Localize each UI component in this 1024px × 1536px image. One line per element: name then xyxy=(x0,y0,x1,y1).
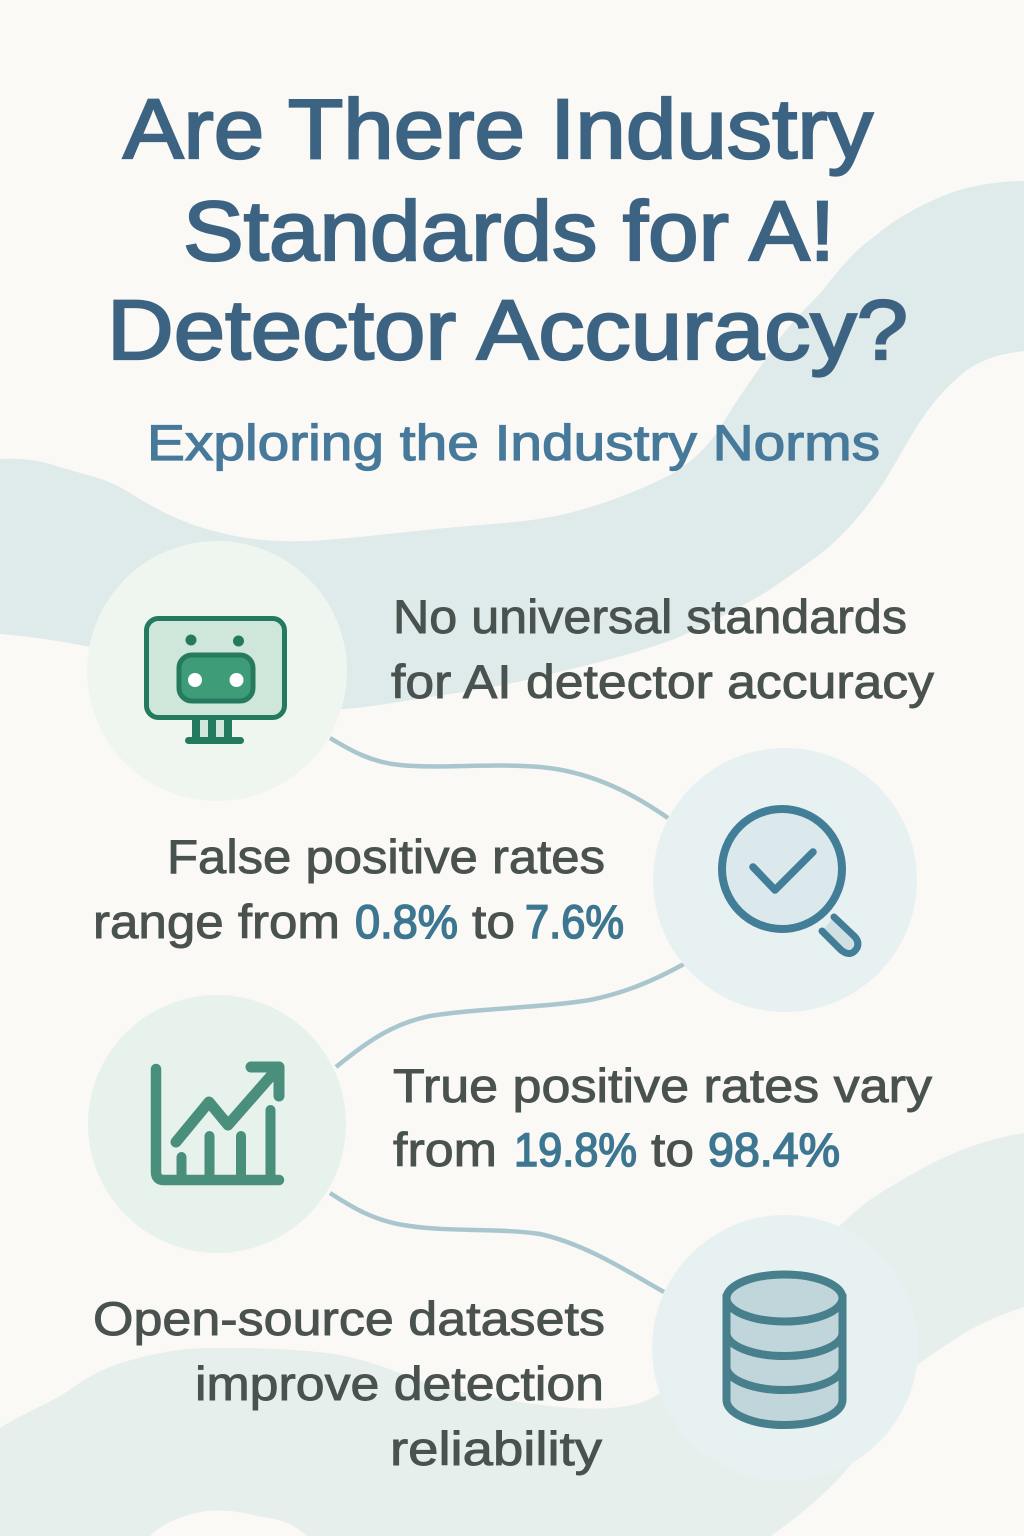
subtitle: Exploring the Industry Norms xyxy=(147,415,880,471)
text: false positive rates: 7.6% xyxy=(525,895,624,948)
text: no universal standards: No universal standards xyxy=(393,590,907,643)
text: false positive rates: range from xyxy=(93,895,340,948)
connector: monitor to magnifier xyxy=(330,738,668,818)
icon: database cylinder xyxy=(652,1215,918,1481)
panel: false positive rates xyxy=(93,748,917,1012)
text: true positive rates: True positive rates vary xyxy=(393,1059,933,1112)
text: open-source datasets: reliability xyxy=(390,1422,603,1475)
text: no universal standards xyxy=(391,590,935,708)
text: false positive rates xyxy=(93,830,624,948)
icon: robot monitor xyxy=(87,541,347,801)
text: true positive rates: 98.4% xyxy=(708,1123,840,1176)
panel: no universal standards xyxy=(87,541,935,801)
title: Detector Accuracy? xyxy=(107,283,908,377)
title: Standards for A! xyxy=(183,184,835,278)
title xyxy=(107,82,908,377)
text: false positive rates: to xyxy=(472,895,515,948)
text: false positive rates: 0.8% xyxy=(355,895,458,948)
title: Are There Industry xyxy=(123,82,873,176)
panel: true positive rates xyxy=(88,995,933,1253)
text: open-source datasets: improve detection xyxy=(195,1357,604,1410)
text: false positive rates: False positive rates xyxy=(167,830,605,883)
text: open-source datasets: Open-source datasets xyxy=(93,1292,605,1345)
text: true positive rates: to xyxy=(651,1123,694,1176)
text: true positive rates: 19.8% xyxy=(514,1123,637,1176)
icon: rising chart xyxy=(88,995,346,1253)
text: true positive rates: from xyxy=(393,1123,497,1176)
text: open-source datasets xyxy=(93,1292,605,1475)
panel: open-source datasets xyxy=(93,1215,918,1481)
text: no universal standards: for AI detector accuracy xyxy=(391,655,935,708)
icon: magnifier with check xyxy=(653,748,917,1012)
text: true positive rates xyxy=(393,1059,933,1176)
connector: magnifier to chart xyxy=(336,964,684,1067)
connector: chart to database xyxy=(330,1193,664,1292)
